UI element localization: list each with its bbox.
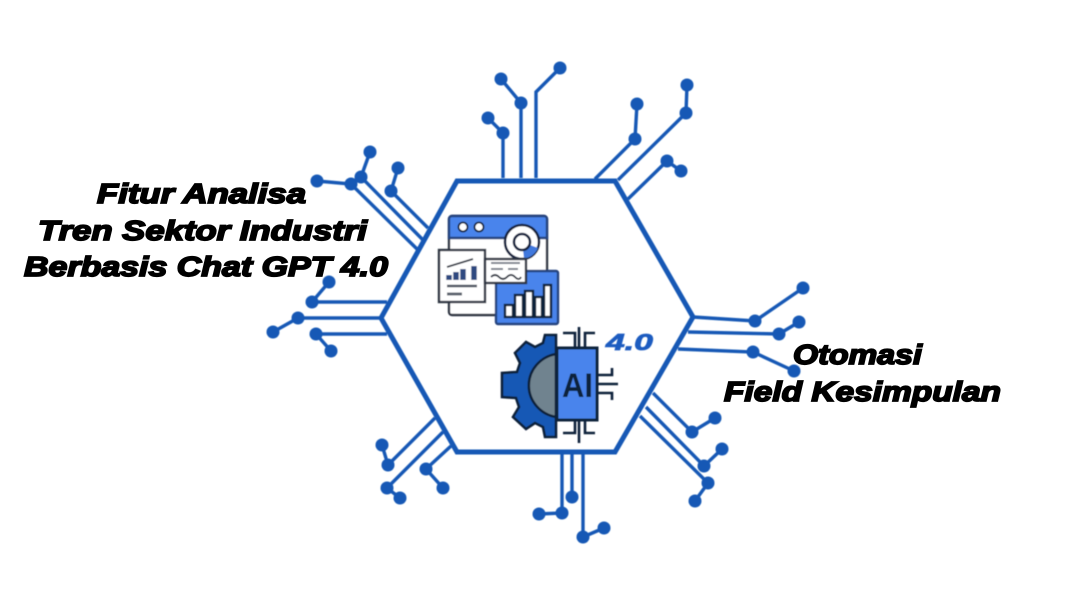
circuit traces: right xyxy=(678,282,810,378)
circuit traces: top left xyxy=(310,146,428,249)
circuit traces: left xyxy=(266,276,387,358)
circuit traces: top xyxy=(482,62,566,178)
right heading text xyxy=(724,339,1001,407)
note card xyxy=(485,259,526,283)
right heading text: Field Kesimpulan xyxy=(724,376,1001,407)
left heading text xyxy=(24,178,389,282)
circuit traces: bottom right xyxy=(640,393,728,508)
icon: AI gear chip xyxy=(502,327,653,443)
circuit traces: top right xyxy=(595,78,694,199)
left heading text: Berbasis Chat GPT 4.0 xyxy=(24,251,389,282)
circuit traces: bottom left xyxy=(376,418,451,504)
left heading text: Fitur Analisa xyxy=(97,178,306,209)
icon: AI gear chip: 4.0 xyxy=(605,329,653,355)
right heading text: Otomasi xyxy=(793,339,923,370)
circuit traces: bottom xyxy=(532,453,610,544)
icon: AI gear chip: AI xyxy=(562,367,593,405)
icon: analytics dashboard xyxy=(439,216,558,324)
circuit hexagon xyxy=(266,62,810,544)
hexagon outline xyxy=(381,181,693,452)
data panel xyxy=(496,271,558,324)
report sheet xyxy=(439,250,485,302)
left heading text: Tren Sektor Industri xyxy=(38,215,368,246)
